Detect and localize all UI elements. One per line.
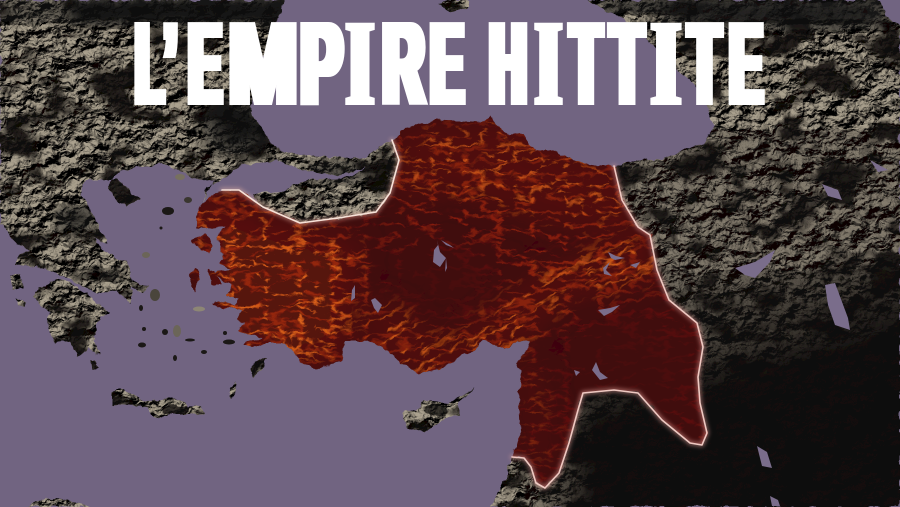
glowing frontier: north-west [222,140,707,488]
title: I [653,0,679,130]
title: H [490,0,526,128]
lakes of the eastern highlands [735,160,888,506]
lakes inside the empire [351,240,640,380]
title: M [229,0,297,128]
title: I [537,0,560,130]
hittite empire territory [188,116,708,487]
title: T [689,0,720,128]
title: R [383,0,424,128]
title: P [301,0,342,128]
title: I [348,0,372,130]
map infographic: E [730,0,762,128]
title: E [189,0,221,128]
title: L [136,0,163,128]
aegean islets [138,174,235,361]
title: ’ [165,0,176,128]
title: E [431,0,463,128]
glowing frontier: east and south [512,166,707,488]
title: T [571,0,601,128]
title: T [611,0,643,128]
